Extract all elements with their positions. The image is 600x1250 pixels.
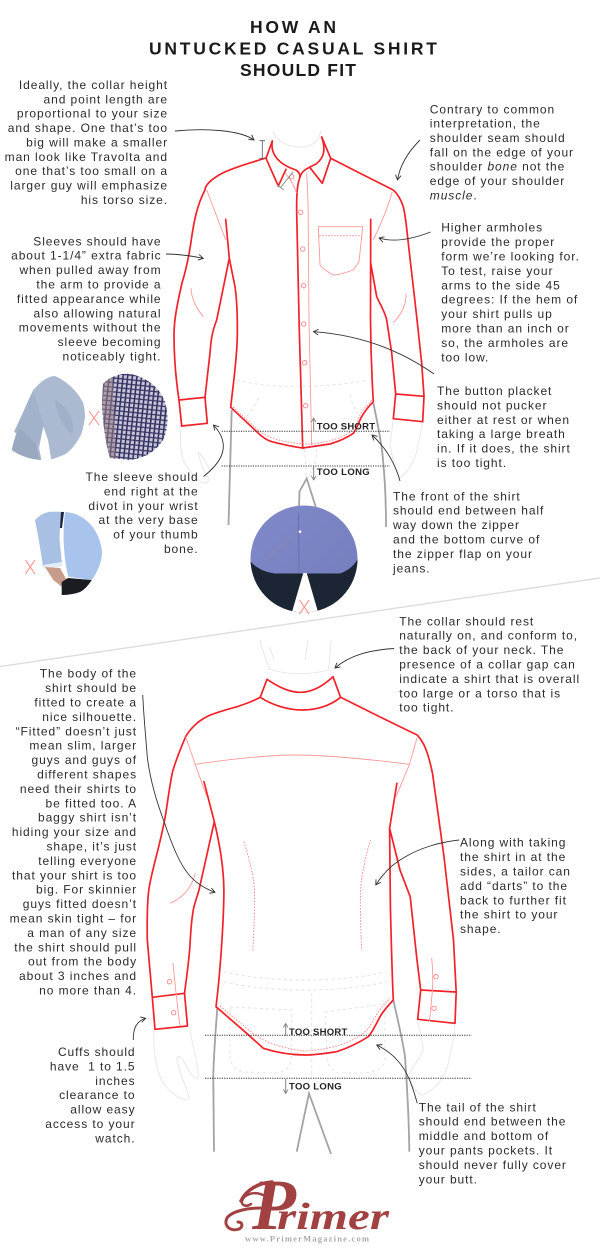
logo [226, 1165, 391, 1245]
text: body fit: a man of any size [27, 926, 137, 940]
text: body fit: shape, it’s just [46, 840, 137, 854]
text: sleeve length: at the very base [98, 513, 199, 527]
text: sleeves: about 1-1/4” extra fabric [11, 249, 162, 263]
icon: red x, cuff [26, 560, 35, 574]
armhole seams [191, 190, 406, 323]
text: back collar: The collar should rest [399, 614, 534, 628]
body and hem [226, 219, 373, 448]
text: sleeve length: bone. [164, 542, 199, 556]
arrow: tail [377, 1045, 417, 1103]
text: darts: back to further fit [460, 893, 567, 907]
title: UNTUCKED CASUAL SHIRT [149, 38, 437, 58]
text: darts: add “darts” to the [460, 879, 568, 893]
text: placket: taking a large breath [437, 427, 566, 441]
text: tail: should never fully cover [419, 1158, 567, 1172]
yoke seam [186, 737, 417, 764]
text: body fit: big. For skinnier [36, 883, 137, 897]
logo url: www.PrimerMagazine.com [245, 1234, 369, 1244]
text: back collar: too tight. [399, 701, 454, 715]
dashed belt and pockets [224, 972, 386, 1075]
text: body fit [10, 667, 137, 998]
text: armholes: provide the proper [441, 235, 555, 249]
text: shoulder seam: interpretation, the [430, 117, 541, 131]
pants lines [228, 403, 386, 527]
back too long guide: TOO LONG [289, 1081, 342, 1092]
text: collar height: his torso size. [81, 193, 168, 207]
logo wordmark: P [251, 1165, 297, 1245]
text: sleeves: fitted appearance while [17, 292, 162, 306]
arrow: sleeve end [204, 425, 223, 476]
text: front length [392, 489, 544, 575]
text: collar height: and shape. One that’s too [8, 121, 168, 135]
text: body fit: shirt should be [45, 681, 137, 695]
too short guide: TOO SHORT [317, 421, 375, 432]
icon: red x, short shirt [300, 600, 309, 614]
text: collar height: man look like Travolta and [5, 150, 168, 164]
placket [297, 177, 303, 448]
hands [180, 420, 423, 483]
text: sleeve length: of your thumb [113, 528, 199, 542]
photo: shirt too short [245, 505, 360, 615]
divider between front and back views [0, 578, 600, 667]
text: front length: and the bottom curve of [393, 532, 540, 546]
text: back collar: too large or a torso that is [399, 686, 561, 700]
text: body fit: about 3 inches and [19, 969, 137, 983]
text: collar height: Ideally, the collar height [19, 78, 168, 92]
collar [266, 137, 331, 186]
text: armholes: so, the armholes are [441, 336, 569, 350]
text: sleeves: the arm to provide a [36, 278, 162, 292]
back too short guide: TOO SHORT [289, 1027, 347, 1038]
text: collar height: proportional to your size [17, 107, 168, 121]
text: shoulder seam [430, 102, 574, 202]
text: body fit: telling everyone [38, 854, 137, 868]
text: body fit: mean slim, larger [29, 739, 137, 753]
pocket [318, 227, 363, 275]
text: body fit: out from the body [28, 955, 137, 969]
text: body fit: guys and guys of [32, 753, 137, 767]
text: sleeve length [86, 470, 199, 556]
arrow: collar [175, 130, 254, 140]
text: body fit: fitted to create a [34, 696, 137, 710]
text: shoulder seam: fall on the edge of your [430, 145, 574, 159]
arrow: armhole [379, 232, 430, 240]
text: sleeves: movements without the [19, 321, 162, 335]
title: SHOULD FIT [240, 60, 356, 80]
text: armholes [441, 221, 580, 364]
back cuff details [173, 958, 433, 1026]
text: tail: The tail of the shirt [419, 1100, 537, 1114]
text: cuffs: have 1 to 1.5 [50, 1059, 136, 1073]
dashed waistband and pockets [235, 380, 368, 427]
text: body fit: The body of the [40, 667, 137, 681]
text: shoulder seam: shoulder bone not the [430, 160, 565, 174]
text: tail [419, 1100, 567, 1186]
back collar [260, 677, 341, 710]
text: armholes: your shirt pulls up [441, 307, 553, 321]
text: placket: should not pucker [437, 398, 547, 412]
arrow: cuffs [133, 1018, 146, 1040]
front shirt diagram [174, 131, 424, 527]
pants lines [213, 1000, 409, 1154]
text: darts: shape. [460, 922, 502, 936]
text: body fit: no more than 4. [39, 984, 137, 998]
text: shoulder seam: shoulder seam should [430, 131, 566, 145]
zipper detail [304, 449, 316, 478]
text: cuffs: watch. [94, 1131, 136, 1145]
text: collar height [5, 78, 168, 207]
hands [154, 1022, 455, 1100]
text: sleeve length: divot in your wrist [88, 499, 199, 513]
text: sleeves: sleeve becoming [58, 335, 162, 349]
text: shoulder seam: edge of your shoulder [430, 174, 565, 188]
back body and hem [214, 822, 393, 1055]
logo: rimer [277, 1196, 391, 1238]
text: tail: your pants pockets. It [419, 1144, 553, 1158]
logo swashes [226, 1182, 272, 1230]
arrow: body [143, 695, 215, 892]
text: body fit: that your shirt is too [12, 868, 137, 882]
text: darts: the shirt in at the [460, 850, 566, 864]
sleeves and shoulders [174, 158, 424, 426]
text: body fit: mean skin tight – for [10, 912, 137, 926]
text: armholes: too low. [441, 350, 489, 364]
text: darts: Along with taking [460, 836, 566, 850]
text: tail: should end between the [419, 1115, 566, 1129]
text: back collar: the back of your neck. The [399, 643, 564, 657]
text: tail: your butt. [419, 1172, 478, 1186]
text: body fit: guys fitted doesn’t [23, 897, 137, 911]
text: body fit: different shapes [37, 768, 137, 782]
text: sleeves [11, 234, 162, 364]
buttons [290, 174, 308, 408]
text: placket: in. If it does, the shirt [437, 442, 571, 456]
back darts [244, 842, 254, 952]
icon: red x, sleeve [89, 411, 99, 425]
text: sleeves: Sleeves should have [33, 234, 162, 248]
text: body fit: be fitted too. A [46, 796, 137, 810]
arrow: darts [376, 840, 459, 885]
title [149, 17, 437, 80]
text: cuffs: inches [95, 1074, 136, 1088]
text: body fit: the shirt should pull [14, 940, 137, 954]
back shirt diagram [147, 640, 456, 1154]
text: darts [460, 836, 571, 936]
text: placket: either at rest or when [437, 413, 570, 427]
collar point marker [277, 172, 293, 190]
text: sleeve length: end right at the [104, 484, 199, 498]
text: armholes: To test, raise your [441, 264, 553, 278]
collar height marker [260, 141, 265, 158]
text: back collar: presence of a collar gap can [399, 658, 576, 672]
text: placket: is too tight. [437, 456, 507, 470]
text: darts: the shirt to your [460, 908, 558, 922]
arrow: sleeve fabric [166, 254, 203, 258]
arrow: placket [314, 332, 434, 374]
photo: sleeve too long [35, 512, 102, 595]
text: front length: the zipper flap on your [393, 547, 533, 561]
text: darts: sides, a tailor can [460, 864, 571, 878]
text: sleeves: noticeably tight. [62, 350, 162, 364]
text: cuffs: Cuffs should [58, 1045, 136, 1059]
text: placket [437, 384, 571, 470]
too long guide: TOO LONG [317, 467, 370, 478]
text: armholes: form we’re looking for. [441, 250, 580, 264]
text: body fit: hiding your size and [12, 825, 137, 839]
text: shoulder seam: muscle. [430, 188, 478, 202]
text: back collar: indicate a shirt that is overall [399, 672, 580, 686]
text: armholes: arms to the side 45 [441, 278, 561, 292]
arrow: shoulder [398, 140, 420, 180]
text: placket: The button placket [437, 384, 552, 398]
text: front length: way down the zipper [392, 518, 520, 532]
hem stitching [233, 399, 372, 444]
text: collar height: one that’s too small on a [15, 164, 168, 178]
text: sleeve length: The sleeve should [86, 470, 199, 484]
text: shoulder seam: Contrary to common [430, 102, 555, 116]
text: body fit: need their shirts to [20, 782, 137, 796]
text: body fit: nice silhouette. [42, 710, 137, 724]
text: armholes: Higher armholes [441, 221, 543, 235]
text: cuffs: access to your [45, 1117, 136, 1131]
back sleeves and shoulders [147, 697, 456, 1029]
text: front length: should end between half [393, 504, 544, 518]
arrow: front hem [372, 435, 400, 481]
photo: sleeve too tight [102, 374, 168, 460]
text: collar height: big will make a smaller [26, 136, 168, 150]
text: sleeves: when pulled away from [18, 263, 162, 277]
text: front length: jeans. [392, 561, 431, 575]
arrow: back collar [335, 648, 394, 668]
text: tail: middle and bottom of [419, 1129, 549, 1143]
neck outline [260, 640, 331, 674]
text: front length: The front of the shirt [393, 489, 521, 503]
text: collar height: and point length are [44, 92, 168, 106]
text: body fit: baggy shirt isn’t [38, 811, 137, 825]
neck outline [273, 131, 321, 147]
photo: sleeve too loose [12, 376, 85, 461]
text: sleeves: also allowing natural [33, 306, 162, 320]
text: body fit: “Fitted” doesn’t just [16, 724, 137, 738]
text: collar height: larger guy will emphasize [10, 179, 168, 193]
elbow creases [170, 873, 195, 903]
text: back collar [399, 614, 580, 715]
text: armholes: degrees: If the hem of [441, 293, 578, 307]
title: HOW AN [250, 17, 336, 37]
text: cuffs [45, 1045, 136, 1145]
text: back collar: naturally on, and conform to, [399, 629, 578, 643]
back hem stitching [220, 998, 390, 1051]
text: cuffs: allow easy [70, 1103, 136, 1117]
text: armholes: more than an inch or [441, 322, 570, 336]
text: cuffs: clearance to [59, 1088, 136, 1102]
